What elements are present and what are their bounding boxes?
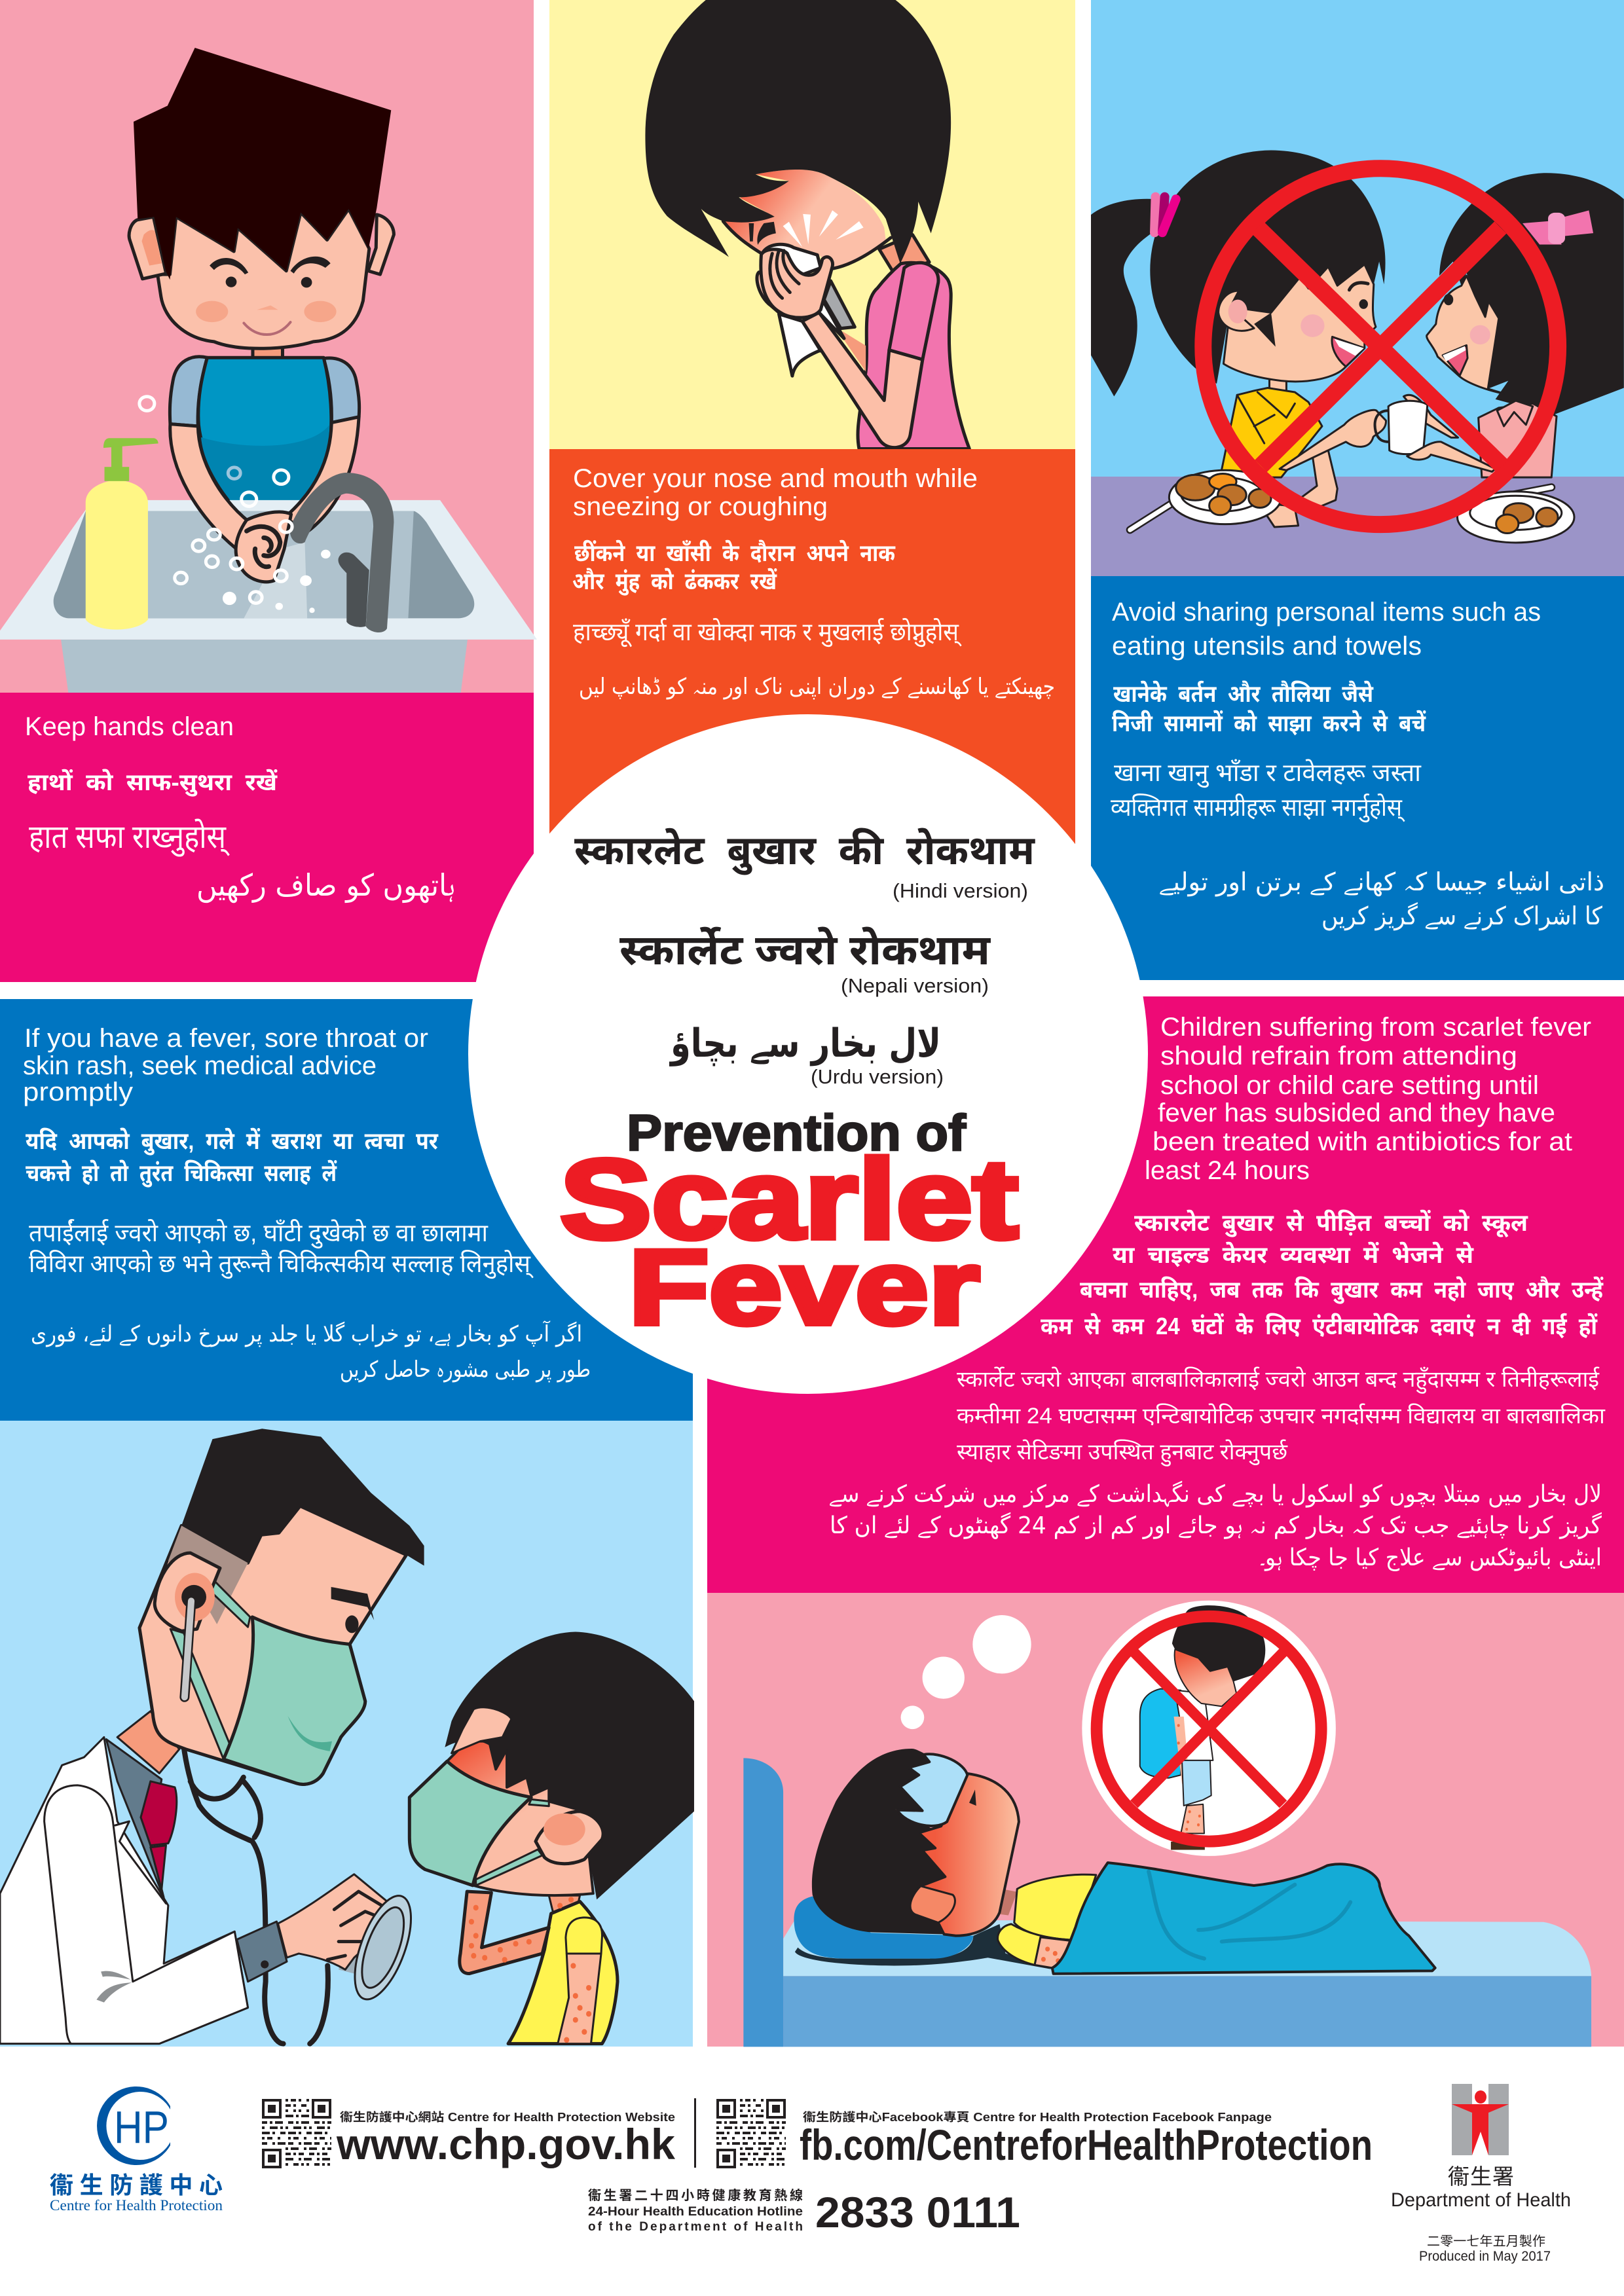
heading: Urdu title: (Urdu version) [811, 1065, 944, 1088]
icon: prohibition sign [1203, 168, 1558, 524]
heading: Hindi title: (Hindi version) [893, 879, 1028, 902]
panel: keep hands clean text: Keep hands clean [25, 712, 234, 741]
panel: cover nose and mouth text: और मुंह को ढंककर रखें [572, 568, 777, 596]
heading: Hindi title [574, 827, 1036, 902]
footer: Facebook label: 衞生防護中心Facebook專頁 Centre for Health Protection Facebook Fanpage [803, 2110, 1272, 2124]
panel: keep hands clean text [0, 693, 534, 982]
title: Prevention of Scarlet Fever: Prevention of [627, 1104, 967, 1161]
footer: Facebook label: fb.com/CentreforHealthProtection [800, 2121, 1373, 2169]
panel: cover nose and mouth text: छींकने या खाँसी के दौरान अपने नाक [574, 539, 896, 566]
footer: hotline [588, 2187, 1020, 2236]
icon: right girl [1427, 173, 1624, 477]
icon: right plate [1457, 487, 1574, 543]
panel: stay home text [707, 996, 1624, 1593]
title: Prevention of Scarlet Fever: Fever [629, 1228, 980, 1347]
panel: stay home text: स्कारलेट बुखार से पीड़ित बच्चों को स्कूल [1134, 1209, 1528, 1237]
panel: stay home text: گریز کرنا چاہئیے جب تک کہ بخار کم نہ ہو جائے اور کم از کم 24 گھنٹوں کے لئے ان کا [830, 1512, 1602, 1539]
panel: avoid sharing text: کا اشراک کرنے سے گریز کریں [1321, 902, 1603, 931]
icon: boy bib and arms [170, 348, 360, 520]
panel: stay home text: اینٹی بائیوٹکس سے علاج کیا جا چکا ہو۔ [1260, 1544, 1602, 1571]
footer: production date: 二零一七年五月製作 [1427, 2234, 1545, 2249]
icon: soap bubbles [139, 397, 331, 613]
panel: keep hands clean text: हाथों को साफ-सुथरा रखें [28, 769, 278, 797]
footer: QR code Facebook [716, 2100, 786, 2167]
footer: QR code website [262, 2100, 331, 2167]
footer: CHP logo: 衞生防護中心 [50, 2172, 223, 2198]
footer: CHP logo: Centre for Health Protection [50, 2197, 223, 2214]
icon: doctor body [0, 1711, 248, 2044]
panel: avoid sharing text: ذاتی اشیاء جیسا کہ کھانے کے برتن اور تولیے [1159, 867, 1604, 897]
icon: stethoscope tube [181, 1697, 328, 2044]
heading: Nepali title [619, 926, 991, 997]
icon: sink [0, 500, 537, 694]
heading: Urdu title: لال بخار سے بچاؤ [669, 1021, 941, 1066]
panel: seek medical advice text: तपाईंलाई ज्वरो आएको छ, घाँटी दुखेको छ वा छालामा [29, 1218, 489, 1248]
panel: sick child in bed illustration [707, 1593, 1624, 2047]
panel: keep hands clean text: हात सफा राख्नुहोस् [29, 818, 230, 857]
panel: avoid sharing text: खाना खानु भाँडा र टावेलहरू जस्ता [1114, 758, 1422, 788]
panel: stay home text: स्कार्लेट ज्वरो आएका बालबालिकालाई ज्वरो आउन बन्द नहुँदासम्म र तिनीहरूलाई [957, 1366, 1600, 1394]
footer: CHP logo [50, 2086, 223, 2214]
panel: cover nose and mouth text: sneezing or coughing [573, 492, 828, 521]
icon: sneezing girl head [645, 0, 951, 268]
icon: sneezing girl body [779, 235, 969, 449]
footer: hotline: 衞生署二十四小時健康教育熱線 [588, 2187, 803, 2203]
panel: stay home text: Children suffering from scarlet fever [1160, 1013, 1591, 1042]
icon: prohibition sign with child and backpack [1082, 1601, 1336, 1856]
title: Prevention of Scarlet Fever: Scarlet [560, 1137, 1018, 1262]
icon: arms and cup [1266, 395, 1496, 527]
icon: child [409, 1632, 694, 2044]
panel: stay home text: या चाइल्ड केयर व्यवस्था में भेजने से [1113, 1241, 1474, 1268]
heading: Nepali title: स्कार्लेट ज्वरो रोकथाम [619, 926, 991, 974]
panel: stay home text: school or child care setting until [1160, 1071, 1539, 1100]
icon: hand and tissue [757, 244, 833, 318]
footer: website label: www.chp.gov.hk [336, 2120, 675, 2168]
panel: cover nose and mouth text: हाच्छ्यूँ गर्दा वा खोक्दा नाक र मुखलाई छोप्नुहोस् [573, 617, 963, 647]
icon: thought bubbles [901, 1615, 1031, 1729]
panel: sharing items illustration [1091, 0, 1624, 576]
panel: keep hands clean text: ہاتھوں کو صاف رکھیں [196, 867, 455, 903]
heading: Nepali title: (Nepali version) [841, 974, 989, 997]
footer: hotline: of the Department of Health [588, 2220, 803, 2234]
icon: arms and hands [170, 417, 359, 582]
panel: avoid sharing text: व्यक्तिगत सामग्रीहरू साझा नगर्नुहोस् [1111, 793, 1405, 822]
footer: hotline: 2833 0111 [815, 2188, 1020, 2236]
panel: stay home text: been treated with antibiotics for at [1153, 1127, 1572, 1156]
footer: production date: Produced in May 2017 [1419, 2249, 1551, 2264]
icon: left plate [1130, 470, 1282, 530]
icon: doctor hand and stethoscope head [237, 1874, 422, 2005]
panel: central white circle [468, 714, 1148, 1394]
panel: stay home text: स्याहार सेटिङमा उपस्थित हुनबाट रोक्नुपर्छ [957, 1439, 1288, 1467]
panel: seek medical advice text: If you have a fever, sore throat or [24, 1024, 428, 1053]
title: Prevention of Scarlet Fever [560, 1104, 1018, 1347]
heading: Urdu title [669, 1021, 944, 1088]
panel: sneezing illustration [549, 0, 1075, 449]
panel: seek medical advice text: skin rash, seek medical advice [23, 1051, 377, 1080]
panel: stay home text: fever has subsided and they have [1158, 1099, 1555, 1127]
icon: boy head [129, 48, 394, 348]
panel: stay home text: कम्तीमा 24 घण्टासम्म एन्टिबायोटिक उपचार नगर्दासम्म विद्यालय वा बालबालिका [957, 1403, 1606, 1429]
panel: seek medical advice text: विविरा आएको छ भने तुरून्तै चिकित्सकीय सल्लाह लिनुहोस् [29, 1249, 534, 1279]
footer: Department of Health logo [1391, 2084, 1571, 2211]
footer: hotline: 24-Hour Health Education Hotline [588, 2205, 803, 2219]
panel: stay home text: least 24 hours [1145, 1156, 1310, 1185]
footer: production date [1419, 2234, 1551, 2264]
icon: sick child lying down [794, 1749, 1435, 1974]
panel: seek medical advice text: اگر آپ کو بخار ہے، تو خراب گلا یا جلد پر سرخ دانوں کے لئے، فوری [31, 1321, 582, 1347]
heading: Hindi title: स्कारलेट बुखार की रोकथाम [574, 827, 1036, 875]
panel: doctor illustration [0, 1421, 694, 2047]
icon: doctor head [139, 1429, 424, 1784]
icon: bed [743, 1758, 1591, 2047]
icon: faucet [290, 473, 394, 632]
panel: seek medical advice text: चकत्ते हो तो तुरंत चिकित्सा सलाह लें [26, 1159, 337, 1188]
panel: avoid sharing text: निजी सामानों को साझा करने से बचें [1112, 709, 1426, 737]
panel: cover nose and mouth text: Cover your nose and mouth while [573, 464, 978, 493]
panel: seek medical advice text: طور پر طبی مشورہ حاصل کریں [340, 1357, 591, 1383]
panel: avoid sharing text [1091, 576, 1624, 980]
icon: soap bottle [86, 438, 158, 630]
panel: cover nose and mouth text: چھینکتے یا کھانسنے کے دوران اپنی ناک اور منہ کو ڈھانپ لیں [579, 674, 1055, 700]
footer: website label: 衞生防護中心網站 Centre for Health Protection Website [340, 2110, 675, 2124]
panel: avoid sharing text: Avoid sharing personal items such as [1112, 598, 1541, 627]
panel: avoid sharing text: खानेके बर्तन और तौलिया जैसे [1113, 680, 1374, 707]
panel: avoid sharing text: eating utensils and towels [1112, 632, 1422, 661]
panel: seek medical advice text [0, 999, 693, 1421]
panel: seek medical advice text: promptly [23, 1078, 133, 1106]
icon: left girl [1091, 150, 1386, 477]
footer: CHP logo: HP [114, 2102, 169, 2153]
footer: Department of Health logo: 衞生署 [1448, 2164, 1514, 2189]
panel: hand washing illustration [0, 0, 537, 694]
panel: cover nose and mouth text [549, 449, 1075, 855]
panel: seek medical advice text: यदि आपको बुखार, गले में खराश या त्वचा पर [26, 1127, 439, 1156]
panel: stay home text: should refrain from attending [1160, 1042, 1517, 1070]
footer: Department of Health logo: Department of Health [1391, 2189, 1571, 2211]
